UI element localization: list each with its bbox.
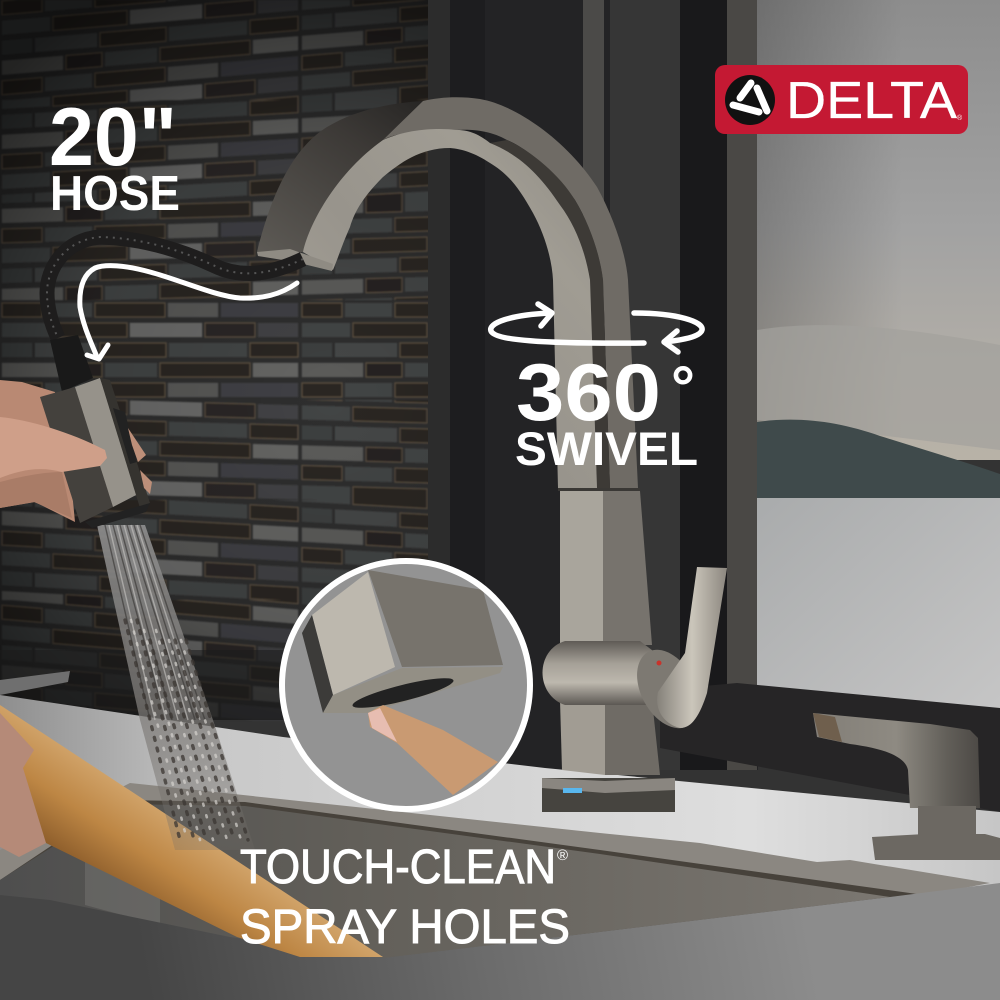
spout outer band (383, 97, 638, 488)
spout dark side (257, 101, 470, 252)
sink basin (0, 800, 917, 958)
soap dispenser (813, 713, 1000, 860)
Delta logo: ® (957, 114, 963, 122)
spray of water (97, 525, 255, 850)
heading: 20 inch hose: 20" (49, 90, 177, 183)
handle lever (657, 567, 727, 728)
faucet body (558, 488, 652, 645)
sink rim (0, 783, 990, 958)
inset finger (368, 705, 498, 795)
heading: 360 degree swivel: 360 (516, 348, 661, 438)
lower hand on board (0, 713, 46, 857)
handle end cap (624, 639, 712, 739)
faucet (257, 97, 727, 812)
window sill (660, 683, 1000, 812)
360 swivel arrows (491, 304, 702, 352)
spout light inner face (303, 129, 597, 488)
counter top (0, 695, 1000, 1000)
inset circle: touch-clean spray holes (282, 561, 530, 809)
fingertips behind head (128, 428, 152, 494)
spout shadow slot (490, 140, 610, 488)
spray head (40, 335, 150, 528)
back of hand (0, 380, 75, 522)
counter front edge (0, 883, 1000, 1000)
touch base with LED (542, 778, 675, 812)
pull-down hose (47, 237, 303, 338)
thumb (0, 417, 107, 478)
fingers (0, 472, 72, 518)
faucet base block (560, 700, 660, 775)
inset spray head (302, 570, 503, 713)
handle hub (542, 641, 665, 705)
heading: touch-clean spray holes: TOUCH-CLEAN (240, 841, 556, 894)
background: window with lake view (757, 0, 1000, 718)
logo mark (725, 75, 775, 125)
background: dark window frame (428, 0, 758, 770)
heading: 20 inch hose: HOSE (50, 167, 180, 221)
heading: touch-clean spray holes: SPRAY HOLES (240, 901, 570, 954)
heading: 360 degree swivel: SWIVEL (515, 422, 698, 475)
heading: touch-clean spray holes: ® (557, 847, 568, 864)
cutting board (0, 705, 383, 957)
background: tiled wall (0, 0, 428, 720)
hand holding spray head (0, 335, 152, 528)
Delta logo (715, 65, 968, 134)
Delta logo: DELTA (786, 72, 957, 130)
spout outlet lip (257, 249, 333, 271)
heading: 360 degree swivel: ° (671, 354, 695, 421)
hose arrow (80, 266, 297, 359)
heading: touch-clean spray holes (240, 841, 570, 954)
heading: 360 degree swivel (515, 348, 698, 475)
